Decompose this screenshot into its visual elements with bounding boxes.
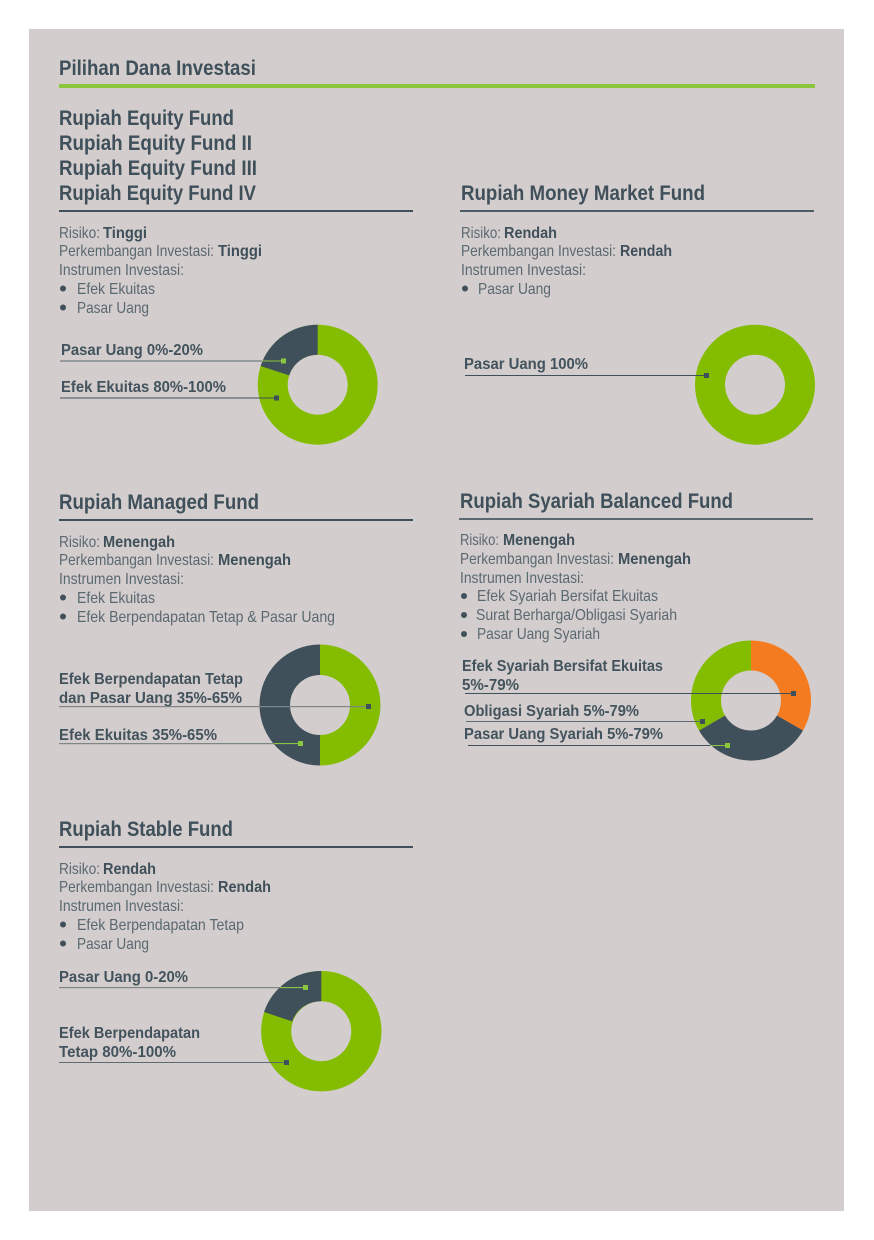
panel: Rupiah Stable Fund [59, 818, 413, 1091]
text block: money market details [461, 225, 672, 298]
callout: Efek Ekuitas [60, 379, 279, 400]
text block: managed details: Perkembangan Investasi: [59, 552, 214, 569]
text block: managed details: Efek Ekuitas [77, 590, 155, 607]
callout: Efek Berpendapatan Tetap [59, 671, 371, 709]
callout: Efek Berpendapatan Tetap: dan Pasar Uang 35%-65% [59, 690, 242, 707]
text block: stable details: Rendah [218, 879, 271, 896]
text block: managed details: Menengah [103, 534, 175, 551]
text block: money market details: Risiko: [461, 225, 501, 242]
callout: Obligasi Syariah [464, 703, 705, 724]
callout: Pasar Uang [59, 969, 308, 990]
callout: Efek Ekuitas [59, 727, 303, 746]
text block: syariah details [460, 532, 691, 643]
callout: Pasar Uang Syariah: Pasar Uang Syariah 5%-79% [464, 726, 663, 743]
text block: stable details: Instrumen Investasi: [59, 898, 184, 915]
callout: Pasar Uang Syariah [464, 726, 730, 748]
text block: managed details: Instrumen Investasi: [59, 571, 184, 588]
heading: money market: Rupiah Money Market Fund [461, 182, 705, 205]
text block: stable details: Rendah [103, 861, 156, 878]
callout: Pasar Uang: Pasar Uang 0%-20% [61, 342, 203, 359]
callout: Pasar Uang: Pasar Uang 0-20% [59, 969, 188, 986]
text block: equity details: Pasar Uang [77, 300, 149, 317]
callout: Obligasi Syariah: Obligasi Syariah 5%-79% [464, 703, 639, 720]
donut chart: syariah [691, 640, 811, 761]
callout: Efek Syariah Bersifat Ekuitas: Efek Syariah Bersifat Ekuitas [462, 658, 663, 675]
donut chart: money market [695, 325, 815, 445]
callout: Pasar Uang 100%: Pasar Uang 100% [464, 356, 588, 373]
callout: Efek Ekuitas: Efek Ekuitas 80%-100% [61, 379, 226, 396]
text block: managed details: Menengah [218, 552, 291, 569]
callout: Efek Berpendapatan: Tetap 80%-100% [59, 1044, 176, 1061]
callout: Efek Berpendapatan Tetap: Efek Berpendapatan Tetap [59, 671, 243, 688]
donut chart: stable [261, 971, 382, 1091]
callout: Pasar Uang [60, 342, 286, 364]
heading: syariah: Rupiah Syariah Balanced Fund [460, 490, 733, 513]
donut chart: equity [258, 325, 378, 445]
page heading: Pilihan Dana Investasi [59, 57, 256, 80]
panel: Rupiah Syariah Balanced Fund [459, 490, 813, 761]
callout: Efek Berpendapatan [59, 1025, 289, 1065]
text block: managed details: Efek Berpendapatan Tetap & Pasar Uang [77, 609, 335, 626]
callout: Efek Ekuitas: Efek Ekuitas 35%-65% [59, 727, 217, 744]
heading: equity funds: Rupiah Equity Fund [59, 107, 234, 130]
text block: syariah details: Menengah [618, 551, 691, 568]
page heading [59, 57, 815, 88]
text block: equity details: Risiko: [59, 225, 100, 242]
callout: Efek Syariah Bersifat Ekuitas: 5%-79% [462, 677, 519, 694]
heading: equity funds: Rupiah Equity Fund III [59, 157, 257, 180]
heading: equity funds [59, 107, 413, 212]
text block: stable details: Risiko: [59, 861, 100, 878]
heading: stable: Rupiah Stable Fund [59, 818, 233, 841]
text block: syariah details: Risiko: [460, 532, 499, 549]
text block: equity details: Tinggi [218, 243, 262, 260]
panel: Rupiah Equity Fund [59, 107, 413, 445]
callout: Efek Berpendapatan: Efek Berpendapatan [59, 1025, 200, 1042]
text block: syariah details: Surat Berharga/Obligasi Syariah [476, 607, 677, 624]
text block: money market details: Rendah [504, 225, 557, 242]
text block: syariah details: Instrumen Investasi: [460, 570, 584, 587]
text block: syariah details: Efek Syariah Bersifat Ekuitas [477, 588, 658, 605]
text block: money market details: Rendah [620, 243, 672, 260]
heading: equity funds: Rupiah Equity Fund II [59, 132, 252, 155]
text block: equity details [59, 225, 262, 317]
text block: syariah details: Pasar Uang Syariah [477, 626, 600, 643]
callout: Pasar Uang 100% [464, 356, 709, 378]
text block: money market details: Instrumen Investasi: [461, 262, 586, 279]
text block: equity details: Perkembangan Investasi: [59, 243, 214, 260]
text block: equity details: Tinggi [103, 225, 147, 242]
text block: stable details: Perkembangan Investasi: [59, 879, 214, 896]
text block: managed details: Risiko: [59, 534, 100, 551]
text block: syariah details: Menengah [503, 532, 575, 549]
text block: managed details [59, 534, 335, 626]
text block: equity details: Efek Ekuitas [77, 281, 155, 298]
callout: Efek Syariah Bersifat Ekuitas [462, 658, 796, 696]
text block: money market details: Perkembangan Investasi: [461, 243, 616, 260]
panel: Rupiah Managed Fund [59, 491, 413, 766]
heading: managed: Rupiah Managed Fund [59, 491, 259, 514]
text block: syariah details: Perkembangan Investasi: [460, 551, 614, 568]
heading: equity funds: Rupiah Equity Fund IV [59, 182, 256, 205]
text block: stable details: Efek Berpendapatan Tetap [77, 917, 244, 934]
text block: stable details: Pasar Uang [77, 936, 149, 953]
text block: stable details [59, 861, 271, 953]
text block: equity details: Instrumen Investasi: [59, 262, 184, 279]
text block: money market details: Pasar Uang [478, 281, 551, 298]
panel: Rupiah Money Market Fund [460, 182, 815, 445]
donut chart: managed [260, 644, 380, 766]
